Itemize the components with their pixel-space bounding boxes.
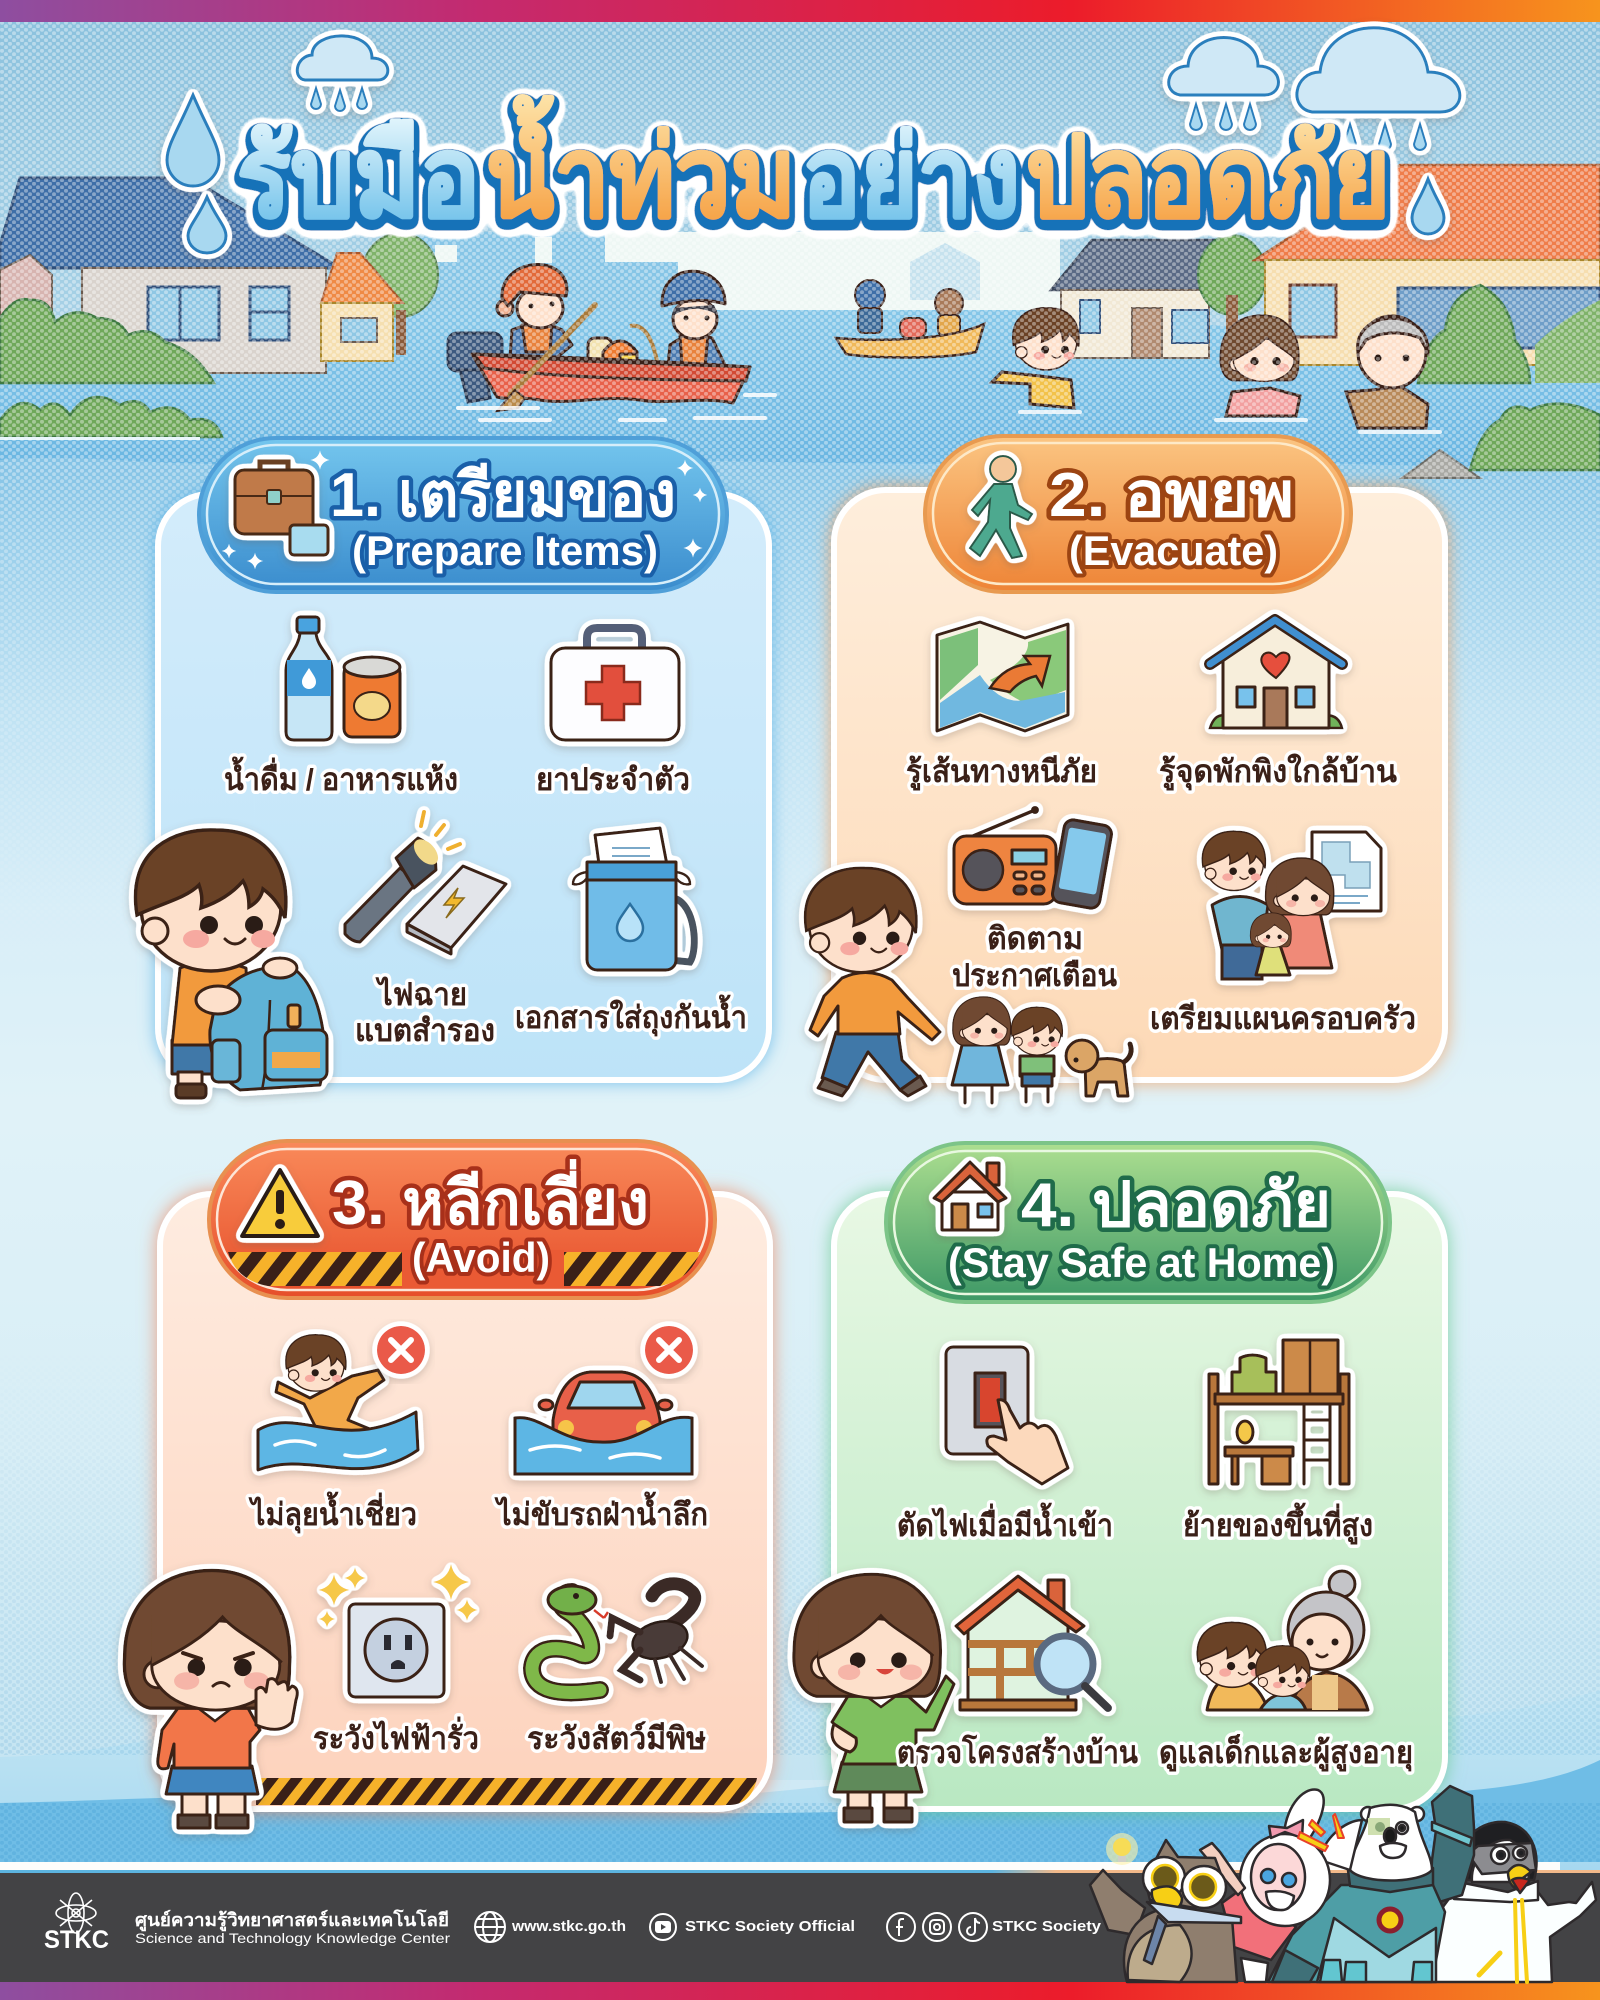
footer: dark band [0,1873,1600,1982]
panel 4 header pill [886,1143,1390,1302]
panel 2: evacuate [805,436,1445,1103]
icon: furniture on loft [1209,1340,1349,1484]
footer: organisation name: ศูนย์ความรู้วิทยาศาสตร์และเทคโนโลยี [135,1909,449,1932]
character: boy with backpack [135,830,327,1098]
icon: walking person [970,456,1032,558]
mascot: penguin [1431,1822,1596,1982]
cloud small left [297,36,388,111]
halftone overlay upper margins [0,472,1600,772]
icon: electric socket with sparks [318,1564,478,1697]
label: do not drive through deep water: ไม่ขับรถฝ่าน้ำลึก [494,1491,708,1532]
header subtitle 4: (Stay Safe at Home) [948,1239,1335,1286]
footer: youtube [650,1914,855,1940]
title: ปลอดภัย [1026,115,1390,240]
mascot: owl [1090,1840,1245,1982]
cloud big right [1297,28,1460,150]
panel 3 hazard stripe [256,1778,757,1805]
footer: bottom gradient bar [0,1982,1600,2000]
icon: instagram [923,1913,951,1941]
label: do not wade strong currents: ไม่ลุยน้ำเชี่ยว [248,1491,417,1534]
icon: red x badge 2 [645,1326,693,1374]
icon: first aid kit [551,628,679,740]
icon: do not wade fast water [258,1335,418,1470]
icon: red x badge 1 [377,1326,425,1374]
skyline blue zone [420,232,690,322]
icon: light switch and hand [946,1347,1068,1484]
footer: social media: STKC Society [992,1918,1102,1935]
icon: do not drive in flood [515,1372,692,1474]
character: boy leading children [805,868,940,1096]
footer: organisation name [135,1909,450,1946]
mascot: bear [1268,1786,1474,1982]
label: personal medicine: ยาประจำตัว [536,762,690,797]
label: inspect house structure: ตรวจโครงสร้างบ้าน [897,1734,1138,1770]
cloud middle right [1169,38,1278,130]
halftone overlay scene [0,22,1600,472]
footer: website [475,1912,626,1942]
top gradient bar [0,0,1600,22]
title [237,95,1390,240]
woman in water [1220,315,1300,416]
mascots [1090,1786,1596,1982]
icon: water bottle and can [286,617,400,740]
panel 2 header pill [925,436,1351,592]
panel 1 card [158,494,769,1080]
label: move belongings up: ย้ายของขึ้นที่สูง [1183,1502,1373,1545]
header sparkles [222,450,707,569]
label: power bank: แบตสำรอง [355,1013,495,1048]
label: care for children and elderly: ดูแลเด็กและผู้สูงอายุ [1159,1733,1413,1772]
panel 4: stay safe at home [794,1143,1445,1822]
label: know escape route: รู้เส้นทางหนีภัย [906,754,1097,791]
panel 3 card [160,1194,770,1809]
character: girl raising stop hand [124,1570,297,1828]
logo mark [56,1893,96,1933]
clouds [297,28,1460,150]
icon: youtube [650,1914,676,1940]
header subtitle 3: (Avoid) [412,1234,550,1281]
boat cargo [588,326,658,370]
panel 1: prepare items [135,438,769,1098]
panel 1 header pill [199,438,727,592]
logo text: STKC [44,1926,109,1954]
water layer [0,310,1600,466]
icon: briefcase [235,462,328,555]
character: children and dog [952,997,1131,1103]
icon: house with heart [1210,620,1342,728]
mascot: rabbit [1222,1790,1362,1982]
halftone overlay bottom [0,1803,1600,1862]
icon: warning triangle [242,1170,318,1236]
city silhouettes [435,232,1060,312]
footer: STKC logo [44,1893,109,1954]
label: drinking water / dry food: น้ำดื่ม / อาหารแห้ง [224,756,458,797]
icon: family and plan [1202,831,1381,979]
title: รับมือ [237,115,480,240]
footer: youtube: STKC Society Official [685,1918,855,1935]
halftone overlay lower margins [0,1479,1600,1755]
label: flashlight: ไฟฉาย [375,976,467,1012]
illustration: small boat [836,280,984,358]
label: follow warnings line 2: ประกาศเตือน [952,958,1117,993]
label: documents in waterproof bag: เอกสารใส่ถุงกันน้ำ [515,994,747,1037]
rescuer 2 [662,271,725,366]
label: know nearby shelter: รู้จุดพักพิงใกล้บ้าน [1159,753,1397,791]
icon: snake and scorpion [532,1584,702,1692]
header title 2: 2. อพยพ [1049,461,1294,530]
rescuer 1 [497,265,572,358]
boy in water [992,308,1079,408]
header title 1: 1. เตรียมของ [330,461,676,530]
panel 3: avoid [124,1141,770,1828]
footer: website: www.stkc.go.th [511,1918,626,1935]
outboard motor [448,333,502,402]
label: follow warnings line 1: ติดตาม [987,921,1083,956]
bottom water pale band [0,1690,1600,1873]
header title 3: 3. หลีกเลี่ยง [332,1159,649,1238]
label: cut power when water enters: ตัดไฟเมื่อมีน้ำเข้า [897,1502,1113,1543]
icon: grandmother and children [1197,1571,1368,1710]
header subtitle 2: (Evacuate) [1069,527,1278,574]
water drops [167,95,1444,253]
icon: house [934,1162,1006,1230]
scene: right houses [1051,165,1600,478]
footer: organisation name: Science and Technology Knowledge Center [135,1930,450,1946]
label: beware electric leaks: ระวังไฟฟ้ารั่ว [313,1716,479,1756]
illustration: people wading [992,308,1440,432]
icon: radio and phone [954,806,1113,910]
icon: tiktok [959,1913,987,1941]
distant building [910,243,980,300]
icon: facebook [887,1913,915,1941]
icon: waterproof bag with documents [573,828,694,970]
illustration: rescue boat [448,265,775,420]
label: beware venomous animals: ระวังสัตว์มีพิษ [527,1721,706,1756]
icon: globe [475,1912,505,1942]
bottom water deep band [0,1760,1600,1862]
panel 3 header pill [209,1141,715,1298]
icon: map with route [937,622,1068,731]
panel 2 card [834,490,1445,1080]
character: girl pointing [794,1574,954,1822]
icon: house inspection [956,1576,1108,1710]
mascot: light bulb [1106,1833,1138,1865]
header subtitle 1: (Prepare Items) [352,527,658,574]
icon: flashlight and power bank [345,812,506,954]
title: น้ำท่วม [486,95,796,240]
old man in water [1346,316,1428,428]
label: prepare family plan: เตรียมแผนครอบครัว [1150,1001,1416,1036]
header title 4: 4. ปลอดภัย [1021,1171,1331,1240]
header hazard stripe [228,1252,700,1286]
title: อย่าง [802,115,1020,240]
scene: left houses [0,178,438,440]
footer: social media [887,1913,1102,1941]
panel 4 card [834,1194,1445,1809]
